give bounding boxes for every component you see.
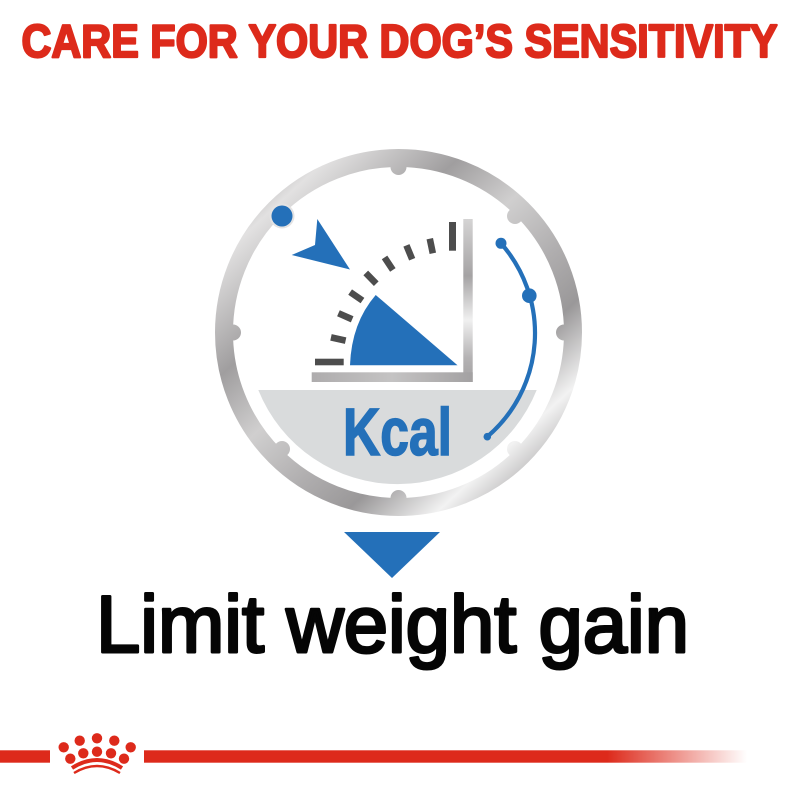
blue progress arc: [484, 238, 537, 441]
blue dot with halo: [270, 204, 294, 228]
Kcal label: Kcal: [343, 395, 452, 470]
metallic ring: [224, 158, 573, 507]
down arrow: [344, 532, 440, 578]
caption: Limit weight gain: [96, 580, 689, 670]
footer rule right: [144, 750, 747, 763]
gauge tick marks: [315, 222, 456, 365]
icon: calorie gauge badge: [224, 158, 573, 507]
footer rule left: [0, 750, 50, 763]
blue wedge: [350, 295, 458, 365]
grey bowl segment: [258, 390, 537, 484]
arrow pointing to gauge: [292, 219, 350, 270]
icon: crown logo: [58, 733, 136, 773]
corner axes: [312, 219, 473, 382]
